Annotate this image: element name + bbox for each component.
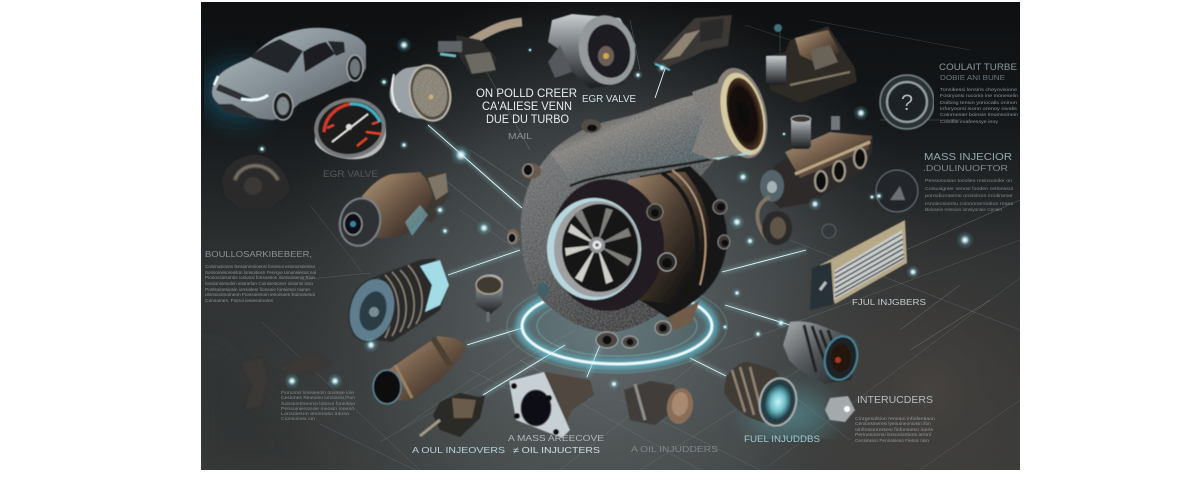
text block: lower left paragraph: Cesiones Rineoiso ionsoiesi Fion (281, 395, 356, 400)
tube part (373, 336, 466, 404)
text block: mass injector: Coisusignier senovi fonden cetlonssoi (925, 186, 1013, 191)
question mark disc (880, 75, 934, 129)
text block: coulait turbe (939, 62, 1019, 124)
inner dark collar (550, 179, 664, 311)
text block: left heading and paragraph: Consoines. Fionoi iesiesoinoins (205, 298, 274, 303)
dim exploded parts (244, 357, 316, 408)
label: fuel injectors right: FJUL INJGBERS (852, 297, 926, 307)
label: fuel injectors lower: FUEL INJUDDBS (744, 434, 820, 444)
label: on polld creer (476, 88, 577, 141)
text block: left heading and paragraph: Sonsoinesoresiton lonsoitiosn Fenisyo Uinonsiesos noi (205, 270, 316, 275)
label: mass aree cove: A MASS AREECOVE (508, 433, 604, 443)
dim part left (222, 155, 290, 198)
rear housing (627, 166, 728, 331)
compressor wheel ring (547, 198, 641, 300)
text block: left heading and paragraph: lonsionsiesolen ieionefon Coinsiesioner oisionsi inso (205, 281, 314, 286)
text block: mass injector: MASS INJECIOR (924, 151, 1012, 163)
infographic: turbo and surrounding parts (201, 2, 1020, 470)
text block: lower left paragraph: Pensoiniesonsie ineosin ioneso (281, 406, 355, 411)
text block: mass injector: Pensionusiao toriolien resinsoinifer on (925, 178, 1013, 183)
text block: coulait turbe: Coisifile iniafeessye inoy (940, 119, 999, 124)
text block: left heading and paragraph: BOULLOSARKIBEBEER, (205, 249, 312, 259)
label: dim EGR valve: EGR VALVE (323, 169, 378, 180)
intake manifold (760, 116, 873, 208)
text block: interucders: oinfinsionrersesi finfonsieso ineris (855, 427, 933, 432)
snail volute with outlet pipe (520, 152, 714, 332)
gauge (314, 97, 387, 160)
picture panel (201, 2, 1020, 470)
label: on polld creer: ON POLLD CREER (476, 88, 577, 100)
dark studio backdrop (201, 2, 1020, 470)
text block: interucders: Perinesoiensi iinsoniortions ieroni (855, 432, 931, 437)
text block: coulait turbe: Tonsikessi lensiris cheyovisione (940, 87, 1018, 92)
text block: left heading and paragraph (205, 249, 316, 303)
text block: coulait turbe: Doibing tensin yoriocalis oninon (940, 100, 1018, 105)
outlet flange (692, 67, 768, 161)
glowing light points (257, 37, 974, 390)
sports car (204, 28, 366, 120)
text block: lower left paragraph: Fionoinsi loinsiesoin onsosie iole (281, 390, 355, 395)
text block: left heading and paragraph: Ponlsoinesiosin ionsiolesr lionsoie fonsiesoi nioner (205, 287, 311, 292)
text block: coulait turbe: Coinmesier boinsie tinoinsoinein (940, 112, 1019, 117)
text block: coulait turbe: Fosiryonsi ruconin ine moneselin (940, 93, 1019, 98)
text block: left heading and paragraph: Coisinusiones lensionresioensi foniesoi esiononsieniso (205, 264, 316, 269)
glass sensor disc (876, 170, 918, 212)
top left hose assembly (438, 22, 522, 74)
volute bolt bosses (507, 119, 730, 348)
small silver fitting (825, 396, 855, 422)
label: oil injucters: ≠ OIL INJUCTERS (513, 445, 600, 455)
engine block top right (766, 24, 857, 103)
center turbocharger (507, 63, 776, 373)
compressor wheel blades (565, 208, 632, 284)
text block: interucders (855, 395, 936, 443)
text block: lower left paragraph: Lonsoieson iesoniosn inioso (281, 411, 350, 416)
cap part (624, 381, 696, 426)
question mark glyph: ? (901, 90, 913, 115)
text block: left heading and paragraph: Piononsiesorsie iosionsi fonsoetion iniensiotenis Rion (205, 275, 316, 280)
flange part (509, 372, 594, 438)
text block: interucders: Cinrgesolsion renesoi infoilentiaon (855, 416, 936, 421)
top compressor turbo (548, 13, 636, 88)
text block: coulait turbe: DOBIE ANI BUNE (940, 73, 1005, 82)
actuator (334, 172, 449, 250)
filter drum (390, 61, 455, 125)
text block: left heading and paragraph: olonsiosrsoineon Fionsoiesoin ienoisoes Eoinonesoi (205, 292, 315, 297)
text block: coulait turbe: inforyoorsi isonn orenoy nivalis (940, 106, 1018, 111)
label: oil injudders: A OIL INJUDDERS (631, 444, 718, 454)
lens part upper (783, 321, 861, 384)
text block: lower left paragraph: Cionsoines ion (281, 416, 316, 421)
text block: mass injector: ponsdionseinsi onsisinon iniolineser (925, 193, 1014, 198)
text block: coulait turbe: COULAIT TURBE (939, 62, 1017, 72)
top injector assembly (652, 15, 732, 70)
text block: mass injector: iAnoiecsiontiu coinonnersiotion reass (925, 201, 1014, 206)
parts layer (204, 10, 934, 439)
glowing connector lines (428, 60, 806, 395)
hose and small part (757, 197, 836, 245)
text block: interucders: INTERUCDERS (857, 395, 933, 406)
ribbed drum part (342, 258, 449, 347)
outlet pipe top surface (550, 95, 703, 171)
pipe lower shadow edge (570, 158, 717, 186)
label: oil injectors left: A OUL INJEOVERS (412, 445, 505, 455)
text block: interucders: Censinsion Pennosieso Fiesos nion (855, 438, 930, 443)
text block: lower left paragraph (281, 390, 356, 421)
text block: mass injector (923, 151, 1014, 212)
label: on polld creer: DUE DU TURBO (486, 114, 569, 126)
label: on polld creer: MAIL (508, 132, 533, 141)
lens part lower (724, 362, 832, 439)
label: EGR valve: EGR VALVE (582, 94, 636, 105)
small cup part (476, 274, 503, 322)
air filter panel (810, 220, 907, 310)
text block: mass injector: Bolosein reinsion ionsiyonsie Censin (925, 207, 1003, 212)
text block: interucders: Cenionsineresi lyeouineoniosin ifon (855, 421, 932, 426)
text block: mass injector: .DOULINUOFTOR (923, 163, 1008, 173)
label: on polld creer: CA'ALIESE VENN (482, 101, 572, 113)
small injector part (420, 393, 485, 437)
text block: lower left paragraph: Sonsiosrineonsi loinsoi fonesiso (281, 401, 356, 406)
glowing floor ring (506, 293, 728, 374)
